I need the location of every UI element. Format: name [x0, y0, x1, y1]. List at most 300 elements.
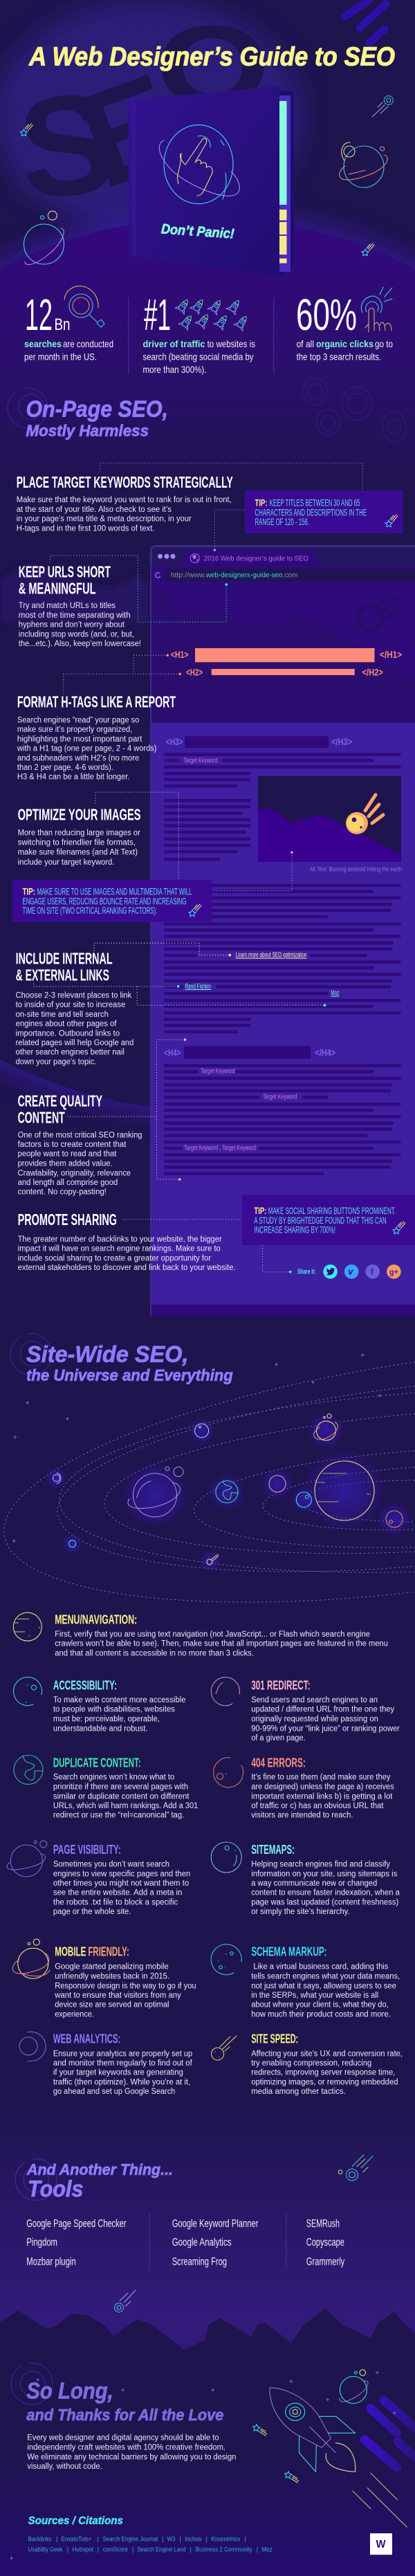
sources and citations: Moz — [261, 2546, 273, 2554]
icons: rockets — [175, 297, 250, 331]
feature: mobile friendly: MOBILE — [55, 1944, 86, 1959]
icon: reload — [156, 573, 160, 578]
feature: schema markup — [211, 1944, 400, 2018]
block: optimize images: More than reducing large images or — [18, 829, 140, 838]
feature: site speed — [212, 2031, 403, 2096]
block: keep URLs short: Try and match URLs to titles — [19, 602, 116, 610]
logo: Webflow W — [370, 2533, 392, 2555]
feature: mobile friendly: experience. — [55, 2010, 94, 2018]
sources and citations: | — [245, 2535, 246, 2543]
block: create quality content — [18, 1092, 142, 1197]
block: create quality content: and length all comprise good — [18, 1179, 118, 1187]
block: internal and external links: importance. Outbound links to — [16, 1029, 120, 1038]
feature: accessibility: must be: perceivable, operable, — [53, 1715, 160, 1723]
block: format H-tags: FORMAT H-TAGS LIKE A REPORT — [17, 693, 176, 711]
sources and citations: EnvatoTuts+ — [61, 2535, 92, 2543]
icon: mobile planet — [12, 1939, 50, 1978]
tip box: titles: RANGE OF 120 - 156. — [255, 517, 309, 527]
inline links — [185, 952, 339, 997]
window dots — [160, 554, 173, 559]
block: place target keywords: at the start of your title. Also check to see it’s — [17, 506, 172, 514]
tip box: images: TIME ON SITE (TWO CRITICAL RANKING FACTORS). — [22, 905, 157, 916]
stat: 60 percent of organic clicks — [296, 287, 393, 362]
rocket body — [270, 2388, 331, 2447]
block: create quality content: factors is to create content that — [18, 1141, 127, 1149]
icon: gear comet — [338, 2155, 373, 2180]
footer background — [0, 2449, 415, 2576]
closing block: We eliminate any technical barriers by allowing you to design — [27, 2453, 236, 2461]
target keyword labels: Target Keyword — [201, 1068, 235, 1076]
block: format H-tags: make sure it’s properly organized, — [17, 726, 132, 734]
feature: site speed: redirects, improving server response time, — [251, 2069, 395, 2077]
feature: 301 redirect — [211, 1677, 400, 1742]
feature: schema markup: not just what it says, allowing users to see — [251, 1982, 396, 1990]
sources and citations: comScore — [102, 2546, 128, 2554]
H-tag connectors — [64, 655, 180, 694]
planet: duplicate content earth — [208, 1473, 246, 1511]
block: format H-tags: than 2 per page, 4-6 words). — [17, 764, 113, 772]
tools heading: Tools — [28, 2176, 83, 2202]
tip box: images: ENGAGE USERS, REDUCING BOUNCE RATE AND INCREASING — [22, 896, 186, 906]
browser window mockup — [150, 545, 415, 1316]
share connectors — [123, 1220, 290, 1272]
feature: 301 redirect: Send users and search engines to an — [251, 1696, 378, 1704]
stat: 60 percent of organic clicks: the top 3 search results. — [297, 351, 381, 362]
browser top edge — [150, 545, 415, 1316]
H tag labels: </H2> — [362, 667, 383, 678]
block: internal and external links: & EXTERNAL LINKS — [16, 966, 109, 984]
vimeo glyph: v — [348, 1267, 353, 1277]
speed lines — [353, 2473, 407, 2527]
block: optimize images: switching to friendlier file formats, — [18, 839, 136, 847]
book spine — [131, 99, 136, 257]
block: internal and external links: down your page’s topic. — [16, 1058, 96, 1067]
feature: web analytics: WEB ANALYTICS: — [53, 2031, 120, 2045]
H4 tag with bar: <H4> — [164, 1047, 181, 1058]
target keyword labels: Target Keyword , Target Keyword — [184, 1144, 256, 1152]
icon: star left — [20, 124, 33, 136]
feature: sitemaps — [211, 1842, 400, 1916]
icon: star — [385, 515, 398, 527]
stat: 60 percent of organic clicks: organic clicks — [316, 338, 374, 349]
H tag labels — [171, 649, 402, 678]
external link dots — [178, 986, 325, 1005]
feature: 301 redirect: of a given page. — [251, 1734, 306, 1742]
feature: web analytics: if your target keywords are generating — [53, 2069, 183, 2077]
on-page SEO section heading — [8, 378, 406, 442]
icon: redirect planet — [211, 1677, 239, 1706]
feature: duplicate content: similar or duplicate content on different — [53, 1792, 190, 1801]
sources and citations: Kissmetrics — [211, 2535, 241, 2543]
stat: number 1 driver of traffic: driver of traffic — [142, 338, 205, 349]
share dot — [289, 1271, 292, 1273]
block: place target keywords — [17, 473, 233, 533]
feature: duplicate content: Search engines won’t know what to — [53, 1774, 174, 1782]
sources and citations: W3 — [167, 2535, 175, 2543]
planet: page visibility — [120, 1461, 190, 1530]
feature: web analytics: Ensure your analytics are properly set up — [53, 2050, 192, 2058]
rocket fins — [299, 2416, 356, 2472]
feature: schema markup: in the SERPs, what your website is all — [251, 1991, 378, 2000]
feature: 301 redirect: updated / different URL from the one they — [251, 1706, 394, 1714]
sources and citations: Business 2 Community — [196, 2546, 252, 2554]
feature: menu navigation: First, verify that you are using text navigation (not JavaScript... or Flash which search engine — [55, 1630, 370, 1639]
external link connectors — [34, 984, 324, 1005]
feature: mobile friendly: device size are served an optimal — [55, 2001, 169, 2009]
tip box: titles — [245, 490, 403, 533]
feature: schema markup: about where your client is, what they do, — [251, 2001, 389, 2009]
tools list columns: SEMRush — [306, 2218, 340, 2229]
dome planet surface — [0, 218, 415, 1110]
rocket window — [286, 2403, 305, 2420]
feature: sitemaps: page was last updated (content freshness) — [251, 1898, 398, 1906]
H tag labels: </H1> — [380, 649, 402, 660]
sources and citations: | — [67, 2546, 68, 2554]
icon: ringed planet left — [24, 211, 64, 265]
icon: sitemap bubble — [211, 1842, 241, 1873]
feature: accessibility: understandable and robust. — [53, 1724, 148, 1733]
icon: facebook — [365, 1264, 380, 1279]
background: haze behind letters — [0, 0, 304, 235]
icon: footer planet — [340, 2370, 368, 2403]
on-page SEO section heading: Mostly Harmless — [26, 422, 149, 440]
background: large SEO letters: S — [12, 62, 122, 230]
feature: menu navigation — [13, 1612, 388, 1658]
feature: accessibility — [14, 1677, 186, 1733]
tools list columns: Pingdom — [26, 2237, 57, 2249]
sources and citations: | — [97, 2535, 99, 2543]
feature: page visibility: page or the whole site. — [53, 1908, 131, 1916]
background stars — [12, 1353, 382, 1543]
closing block — [11, 2363, 236, 2471]
feature: sitemaps: a way communicate new or changed — [251, 1879, 377, 1888]
background: blue comet tail — [365, 2400, 415, 2467]
URL text: http://www. — [171, 572, 206, 580]
feature: site speed: media among other tactics. — [251, 2088, 346, 2096]
feature: mobile friendly: want to ensure that visitors from any — [54, 1991, 181, 2000]
H2 tag bar — [212, 669, 355, 675]
tip box: sharing — [242, 1195, 415, 1245]
book cover — [128, 86, 279, 276]
browser tab — [181, 550, 320, 565]
browser content page — [151, 723, 415, 1305]
URL text: web-designers-guide-seo — [205, 572, 283, 580]
feature: web analytics: and monitor them regularly to find out of — [53, 2059, 193, 2068]
URL connector dot — [225, 583, 228, 586]
background: blue comet streaks — [344, 0, 386, 43]
tools list columns: Mozbar plugin — [26, 2256, 76, 2267]
block: format H-tags — [17, 693, 176, 782]
tools list columns: Copyscape — [306, 2237, 344, 2249]
block: keep URLs short: KEEP URLS SHORT — [19, 562, 111, 580]
tools heading: And Another Thing... — [26, 2161, 173, 2178]
tools list columns: Google Keyword Planner — [172, 2218, 259, 2229]
icon: 404 planet — [214, 1758, 243, 1787]
decorative rings — [15, 2159, 57, 2200]
inline links: Rand Fishkin — [185, 983, 211, 991]
feature: schema markup: Like a virtual business card, adding this — [253, 1963, 389, 1971]
block: internal and external links: to inside of your site to increase — [16, 1001, 125, 1009]
feature: menu navigation: crawlers won’t be able to see). Then, make sure that all important pages are featured in the menu — [55, 1640, 388, 1648]
comet: site speed — [199, 1550, 221, 1572]
feature: web analytics: Console and Webmaster Tools. — [53, 2097, 160, 2106]
feature: duplicate content: prioritize if there are several pages with — [53, 1783, 188, 1792]
tab title: 2016 Web designer’s guide to SEO — [204, 555, 308, 563]
rocket flame — [326, 2443, 356, 2472]
block: internal and external links: related pages will help Google and — [16, 1039, 133, 1047]
ghost asteroid — [358, 594, 398, 629]
tools heading — [15, 2159, 173, 2202]
content connectors — [68, 1040, 185, 1179]
icon: earth — [14, 1756, 43, 1785]
feature: web analytics: traffic (then optimize). While you’re at it, — [53, 2078, 190, 2086]
feature: sitemaps: content to ensure faster indexation, when a — [251, 1889, 400, 1897]
feature: site speed: Affecting your site’s UX and conversion rate, — [251, 2050, 403, 2058]
block: optimize images — [18, 806, 141, 867]
icon: visibility planet — [7, 1841, 47, 1877]
block: internal and external links: on-site time and tell search — [16, 1011, 109, 1019]
block: keep URLs short: & MEANINGFUL — [19, 579, 95, 597]
planet: 301 redirect — [261, 1467, 294, 1500]
asteroid — [346, 812, 368, 834]
tools list columns: Grammerly — [306, 2256, 344, 2267]
left hazy mountains — [0, 564, 150, 623]
block: format H-tags: Search engines “read” your page so — [17, 716, 139, 724]
H tag labels: <H1> — [171, 649, 188, 660]
feature: site speed: optimizing images, or removing embedded — [251, 2078, 398, 2086]
block: create quality content: CREATE QUALITY — [18, 1092, 102, 1110]
closing block: independently craft websites with 100% creative freedom. — [27, 2444, 225, 2452]
dome glow — [0, 211, 415, 1117]
block: create quality content: CONTENT — [18, 1108, 65, 1126]
block: place target keywords: in your page’s meta title & meta description, in your — [17, 515, 192, 524]
stat: 12 billion searches — [24, 286, 113, 362]
block: internal and external links: engines about other pages of — [16, 1020, 117, 1029]
stat: number 1 driver of traffic — [142, 290, 255, 375]
book title: Don't Panic: Don’t Panic! — [160, 221, 235, 242]
block: create quality content: provides them added value. — [18, 1160, 113, 1168]
tip box: images: TIP: — [22, 886, 35, 896]
feature: 404 errors: are designed) unless the page a) receives — [251, 1783, 394, 1792]
feature: 404 errors: 404 ERRORS: — [251, 1755, 306, 1769]
rocket centre line — [310, 2427, 335, 2453]
block: format H-tags: highlighting the most important part — [17, 735, 142, 744]
connector dot — [214, 549, 216, 551]
sources and citations: | — [190, 2546, 192, 2554]
stat: number 1 driver of traffic: more than 300%). — [142, 364, 206, 375]
decorative rings — [11, 2363, 53, 2404]
H3 tag with bar: </H3> — [331, 736, 352, 747]
block: promote sharing: include social sharing to create a greater opportunity for — [18, 1254, 211, 1262]
logo: Webflow W: W — [376, 2539, 386, 2550]
block: keep URLs short: hyphens and don’t worry about — [19, 621, 125, 629]
content dots — [180, 1040, 185, 1179]
footer background stars — [10, 2371, 396, 2560]
background: large SEO letters: O — [156, 2, 270, 129]
feature: page visibility: PAGE VISIBILITY: — [53, 1842, 121, 1857]
placeholder text lines — [164, 755, 400, 1174]
asteroid tail — [365, 795, 383, 823]
feature: mobile friendly: FRIENDLY: — [88, 1944, 129, 1959]
feature: duplicate content: URLs, which will harm rankings. Add a 301 — [53, 1802, 198, 1810]
feature: accessibility: ACCESSIBILITY: — [53, 1678, 117, 1693]
icon: accessibility planet — [14, 1677, 42, 1706]
feature: site speed: try enabling compression, reducing — [251, 2059, 371, 2068]
icon: star right — [362, 243, 374, 256]
tip box: sharing: INCREASE SHARING BY 700%! — [254, 1225, 335, 1235]
planet: accessibility — [290, 1486, 317, 1514]
tools section background — [0, 2096, 415, 2350]
sources and citations: Hubspot — [72, 2546, 93, 2554]
tools list columns: Google Analytics — [172, 2237, 232, 2249]
image connectors — [95, 792, 292, 891]
icon: gear comet small — [115, 2290, 136, 2312]
closing block: and Thanks for All the Love — [26, 2406, 224, 2424]
target keyword labels: Target Keyword — [263, 1094, 297, 1101]
feature: 404 errors: of traffic or c) has an obvious URL that — [251, 1802, 384, 1810]
block: keep URLs short: most of the time separating with — [19, 611, 131, 620]
internal link dot — [228, 954, 231, 956]
feature: sitemaps: SITEMAPS: — [251, 1842, 295, 1857]
google plus glyph: g+ — [389, 1269, 398, 1277]
feature: duplicate content: DUPLICATE CONTENT: — [53, 1755, 141, 1769]
block: optimize images: make sure filenames (and Alt Text) — [18, 848, 138, 856]
social share row — [297, 1264, 401, 1279]
block: internal and external links: Choose 2-3 relevant places to link — [16, 991, 131, 1000]
block: place target keywords: Make sure that the keyword you want to rank for is out in front, — [17, 496, 232, 504]
block: format H-tags: H3 & H4 can be a little bit longer. — [17, 773, 130, 782]
feature: 404 errors: visitors are intended to reach. — [251, 1812, 353, 1820]
feature: menu navigation: MENU/NAVIGATION: — [55, 1612, 137, 1627]
H1 tag bar — [195, 648, 375, 662]
stat: 12 billion searches: Bn — [54, 315, 71, 334]
book tabs: yellow — [279, 210, 286, 263]
feature: 404 errors — [214, 1755, 394, 1820]
closing block: Every web designer and digital agency should be able to — [27, 2434, 219, 2442]
book tab: mint — [279, 101, 286, 205]
inline links: Learn more about SEO optimization — [236, 952, 307, 959]
H3 tag with bar: <H3> — [166, 736, 183, 747]
feature: page visibility: the robots .txt file to block a specific — [53, 1898, 178, 1906]
closing block: So Long, — [26, 2377, 113, 2403]
feature: page visibility: engines to view specific pages and then — [53, 1870, 190, 1878]
sources and citations: | — [257, 2546, 258, 2554]
block: create quality content: content. No copy-pasting! — [18, 1188, 107, 1197]
browser footer — [151, 1305, 415, 1316]
feature: accessibility: To make web content more accessible — [53, 1696, 186, 1704]
sources and citations: Backlinko — [28, 2535, 52, 2543]
stat: 12 billion searches: 12 — [25, 290, 53, 340]
tip box: sharing: TIP: — [254, 1206, 266, 1216]
feature: mobile friendly — [12, 1939, 196, 2018]
block: keep URLs short — [19, 562, 141, 648]
sources and citations — [28, 2515, 273, 2554]
block: format H-tags: with a H1 tag (one per page, 2 - 4 words) — [17, 745, 157, 753]
closing block: visually, without code. — [27, 2463, 102, 2471]
block: promote sharing: PROMOTE SHARING — [18, 1211, 117, 1229]
rocket illustration — [270, 2388, 407, 2527]
sources and citations: Search Engine Journal — [102, 2535, 158, 2543]
block: create quality content: people want to read and that — [18, 1150, 117, 1159]
block: create quality content: One of the most critical SEO ranking — [18, 1131, 142, 1139]
stat: 60 percent of organic clicks: 60% — [296, 290, 357, 340]
URL text — [171, 572, 297, 580]
sources and citations: Sources / Citations — [28, 2515, 123, 2527]
block: internal and external links — [16, 949, 133, 1067]
stat: 12 billion searches: are conducted — [63, 338, 113, 349]
twitter glyph — [326, 1268, 335, 1276]
feature: mobile friendly: Responsive design is the way to go if you — [55, 1982, 196, 1990]
icon: footer stars — [252, 2423, 299, 2485]
sources and citations: | — [56, 2535, 57, 2543]
tip box: titles: TIP: — [255, 498, 267, 508]
site-wide SEO heading: Site-Wide SEO, — [26, 1341, 188, 1367]
sources and citations: | — [180, 2535, 181, 2543]
tools list columns: Screaming Frog — [172, 2256, 227, 2267]
hero section — [0, 0, 415, 1117]
site-wide SEO heading — [10, 1334, 233, 1384]
feature: schema markup: tells search engines what your data means, — [251, 1972, 400, 1980]
feature: accessibility: to people with disabilities, websites — [53, 1706, 175, 1714]
icon: schema planet — [211, 1944, 241, 1975]
tip box: images — [12, 880, 212, 922]
sources and citations: | — [162, 2535, 163, 2543]
stat: number 1 driver of traffic: #1 — [144, 290, 171, 340]
feature: duplicate content — [14, 1755, 198, 1820]
icon: google plus — [387, 1264, 401, 1279]
feature: page visibility — [7, 1841, 190, 1916]
tools list columns: Google Page Speed Checker — [26, 2218, 126, 2229]
target keyword labels — [183, 757, 297, 1152]
solar system diagram — [0, 1299, 415, 1648]
feature: page visibility: other times you might not want them to — [53, 1879, 189, 1888]
planet: 404 errors — [376, 1501, 412, 1537]
orbits — [0, 1299, 415, 1648]
icon: clicking finger — [361, 287, 392, 332]
target keyword labels: Target Keyword — [183, 757, 218, 764]
URL bar — [166, 569, 415, 582]
header mountains — [151, 585, 415, 723]
feature: web analytics: go ahead and set up Google Search — [53, 2088, 175, 2096]
planet: mobile friendly — [307, 1411, 346, 1450]
feature: mobile friendly: Google started penalizing mobile — [55, 1963, 169, 1971]
image connector dot — [290, 851, 293, 854]
icon: gear comet — [372, 95, 393, 117]
feature: 404 errors: It’s fine to use them (and make sure they — [251, 1774, 391, 1782]
URL connector — [50, 555, 226, 622]
block: internal and external links: other search engines better nail — [16, 1049, 124, 1057]
social share row: Share it: — [297, 1268, 315, 1276]
planet: schema — [61, 1533, 83, 1555]
H4 tag with bar: </H4> — [315, 1047, 335, 1058]
article image: asteroid hitting the earth — [258, 776, 401, 862]
stat: number 1 driver of traffic: to websites is — [208, 338, 255, 349]
block: promote sharing: The greater number of backlinks to your website, the bigger — [18, 1235, 222, 1244]
background: large SEO letters — [12, 2, 270, 230]
icon: star — [393, 1222, 405, 1234]
tools list columns — [26, 2213, 344, 2270]
block: format H-tags: and subheaders with H2’s (no more — [17, 754, 139, 762]
book back cover and pages — [279, 91, 294, 277]
icon: star — [189, 904, 201, 917]
icon: magnifier — [64, 286, 104, 327]
feature: sitemaps: information on your site, using sitemaps is — [251, 1870, 398, 1878]
stat: 60 percent of organic clicks: of all — [297, 338, 314, 349]
feature: page visibility: see the entire website. Add a meta in — [53, 1889, 182, 1897]
icon: ringed planet right — [340, 142, 387, 187]
block: keep URLs short: the...etc.). Also, keep’em lowercase! — [19, 640, 141, 648]
feature: 301 redirect: 301 REDIRECT: — [251, 1678, 310, 1693]
